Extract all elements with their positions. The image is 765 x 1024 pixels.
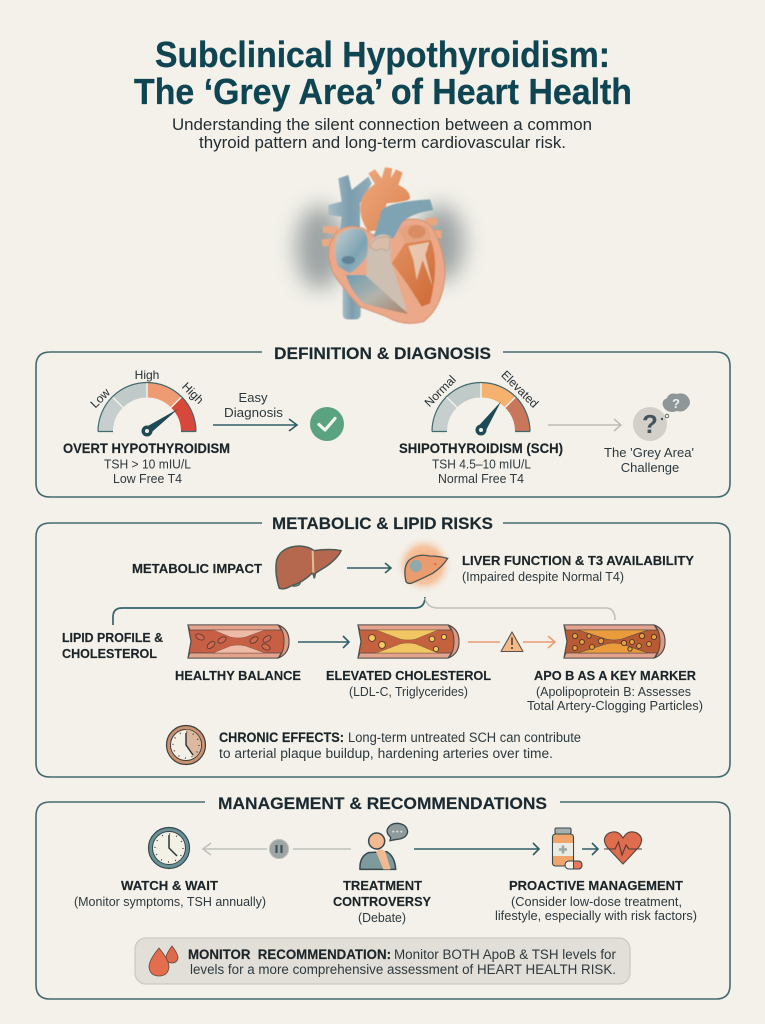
icon: blood drops	[149, 946, 178, 976]
label: treatment controversy	[333, 878, 431, 925]
label: elevated cholesterol: (LDL-C, Triglycerides)	[349, 684, 468, 699]
gauge: overt hypothyroidism: Low	[87, 385, 113, 411]
text: subclinical hypothyroidism: TSH 4.5–10 mIU/L	[432, 456, 531, 472]
arrow: to proactive management	[414, 843, 539, 855]
text: recommendation: Monitor BOTH ApoB & TSH levels for	[394, 947, 616, 962]
icon: green check	[310, 407, 344, 441]
text: overt hypothyroidism: Low Free T4	[113, 471, 182, 486]
text: liver function: (Impaired despite Normal T4)	[462, 569, 624, 584]
gauge: subclinical hypothyroidism: Normal	[422, 373, 459, 410]
icon: chronic effects clock	[166, 726, 206, 764]
panel border	[36, 802, 730, 999]
label: proactive management: lifestyle, especially with risk factors)	[495, 908, 697, 923]
label: apo b marker: APO B AS A KEY MARKER	[534, 668, 697, 683]
label: healthy balance: HEALTHY BALANCE	[175, 668, 301, 683]
panel border	[36, 523, 730, 777]
label: proactive management: (Consider low-dose treatment,	[511, 894, 682, 909]
callout background	[135, 938, 630, 984]
text: chronic effects	[219, 730, 581, 761]
text: recommendation	[188, 947, 616, 977]
text: liver function	[462, 553, 694, 584]
text: overt hypothyroidism	[63, 441, 230, 486]
title	[134, 34, 632, 112]
arrow: to watch and wait with pause	[203, 840, 351, 858]
icon: heart with pulse	[604, 832, 642, 864]
arrow: medicine to heart	[582, 843, 598, 855]
icon: question mark and thought cloud	[633, 393, 690, 441]
title: Subclinical Hypothyroidism:	[155, 34, 610, 75]
label: lipid profile	[62, 630, 163, 661]
connector: grey bracket	[425, 598, 615, 620]
label: proactive management	[495, 878, 697, 923]
label: treatment controversy: (Debate)	[358, 910, 406, 925]
gauge: overt hypothyroidism: High	[179, 379, 207, 407]
text: recommendation: MONITOR RECOMMENDATION:	[188, 947, 391, 962]
gauge: overt hypothyroidism: High	[135, 368, 159, 382]
title: The ‘Grey Area’ of Heart Health	[134, 71, 632, 112]
icon: person thinking with speech bubble	[360, 823, 408, 869]
label: easy diagnosis: Easy	[239, 390, 268, 405]
label: elevated cholesterol: ELEVATED CHOLESTEROL	[326, 668, 491, 683]
callout: monitor recommendation	[135, 938, 630, 984]
label: metabolic impact: METABOLIC IMPACT	[132, 561, 262, 576]
icon: question mark and thought cloud: ?	[642, 409, 658, 439]
label: elevated cholesterol	[326, 668, 491, 699]
icon: stressed liver with glow	[395, 536, 453, 594]
panel: definition and diagnosis	[36, 345, 730, 497]
arrow: to easy diagnosis	[213, 419, 297, 431]
text: chronic effects: CHRONIC EFFECTS:	[219, 730, 344, 745]
icon: question mark and thought cloud: ?	[672, 396, 680, 411]
icon: artery with elevated cholesterol	[358, 625, 459, 658]
label: treatment controversy: CONTROVERSY	[333, 894, 431, 909]
label: grey area challenge	[604, 445, 694, 475]
heading: management and recommendations: MANAGEMENT & RECOMMENDATIONS	[218, 795, 547, 813]
label: apo b marker: (Apolipoprotein B: Assesses	[536, 684, 691, 699]
panel border	[36, 352, 730, 497]
text: subclinical hypothyroidism	[399, 441, 563, 486]
label: lipid profile: CHOLESTEROL	[62, 646, 157, 661]
text: overt hypothyroidism: OVERT HYPOTHYROIDISM	[63, 441, 230, 456]
text: subclinical hypothyroidism: Normal Free T4	[438, 471, 524, 486]
label: easy diagnosis	[224, 390, 284, 420]
subtitle	[172, 115, 592, 152]
panel: management and recommendations	[36, 795, 730, 999]
heading: metabolic and lipid risks: METABOLIC & LIPID RISKS	[272, 515, 493, 533]
label: watch and wait: WATCH & WAIT	[121, 878, 218, 893]
text: chronic effects: to arterial plaque buildup, hardening arteries over time.	[219, 746, 553, 761]
subtitle: Understanding the silent connection between a common	[172, 115, 592, 134]
label: grey area challenge: Challenge	[621, 460, 679, 475]
icon: healthy liver	[276, 546, 341, 589]
arrow: to grey area	[548, 419, 621, 431]
text: overt hypothyroidism: TSH > 10 mIU/L	[104, 456, 191, 472]
arrow: healthy to elevated	[298, 636, 349, 648]
label: proactive management: PROACTIVE MANAGEMENT	[509, 878, 683, 893]
icon: healthy artery	[188, 625, 289, 658]
gauge: subclinical hypothyroidism: Elevated	[498, 368, 541, 411]
icon: artery with apo b particles	[564, 625, 665, 658]
icon: anatomical heart	[296, 167, 464, 323]
text: chronic effects: Long-term untreated SCH can contribute	[348, 730, 581, 745]
arrow: to stressed liver	[347, 563, 391, 573]
arrow: elevated to apo b with warning	[468, 632, 555, 652]
text: liver function: LIVER FUNCTION & T3 AVAILABILITY	[462, 553, 694, 568]
label: grey area challenge: The 'Grey Area'	[604, 445, 694, 460]
panel: metabolic and lipid risks	[36, 515, 730, 777]
label: watch and wait	[74, 878, 266, 909]
label: watch and wait: (Monitor symptoms, TSH annually)	[74, 894, 266, 909]
subtitle: thyroid pattern and long-term cardiovascular risk.	[199, 133, 566, 152]
gauge: overt hypothyroidism	[87, 368, 207, 436]
connector: teal bracket	[113, 597, 425, 625]
label: treatment controversy: TREATMENT	[343, 878, 422, 893]
label: apo b marker	[527, 668, 703, 713]
text: recommendation: levels for a more comprehensive assessment of HEART HEALTH RISK.	[190, 962, 616, 977]
label: easy diagnosis: Diagnosis	[224, 405, 284, 420]
label: lipid profile: LIPID PROFILE &	[62, 630, 163, 645]
icon: medicine bottle and pill	[552, 828, 582, 869]
label: apo b marker: Total Artery-Clogging Particles)	[527, 698, 703, 713]
gauge: subclinical hypothyroidism	[422, 368, 541, 436]
text: subclinical hypothyroidism: SHIPOTHYROIDISM (SCH)	[399, 441, 563, 456]
heading: definition and diagnosis: DEFINITION & DIAGNOSIS	[274, 345, 491, 363]
icon: watch and wait clock	[148, 828, 190, 868]
